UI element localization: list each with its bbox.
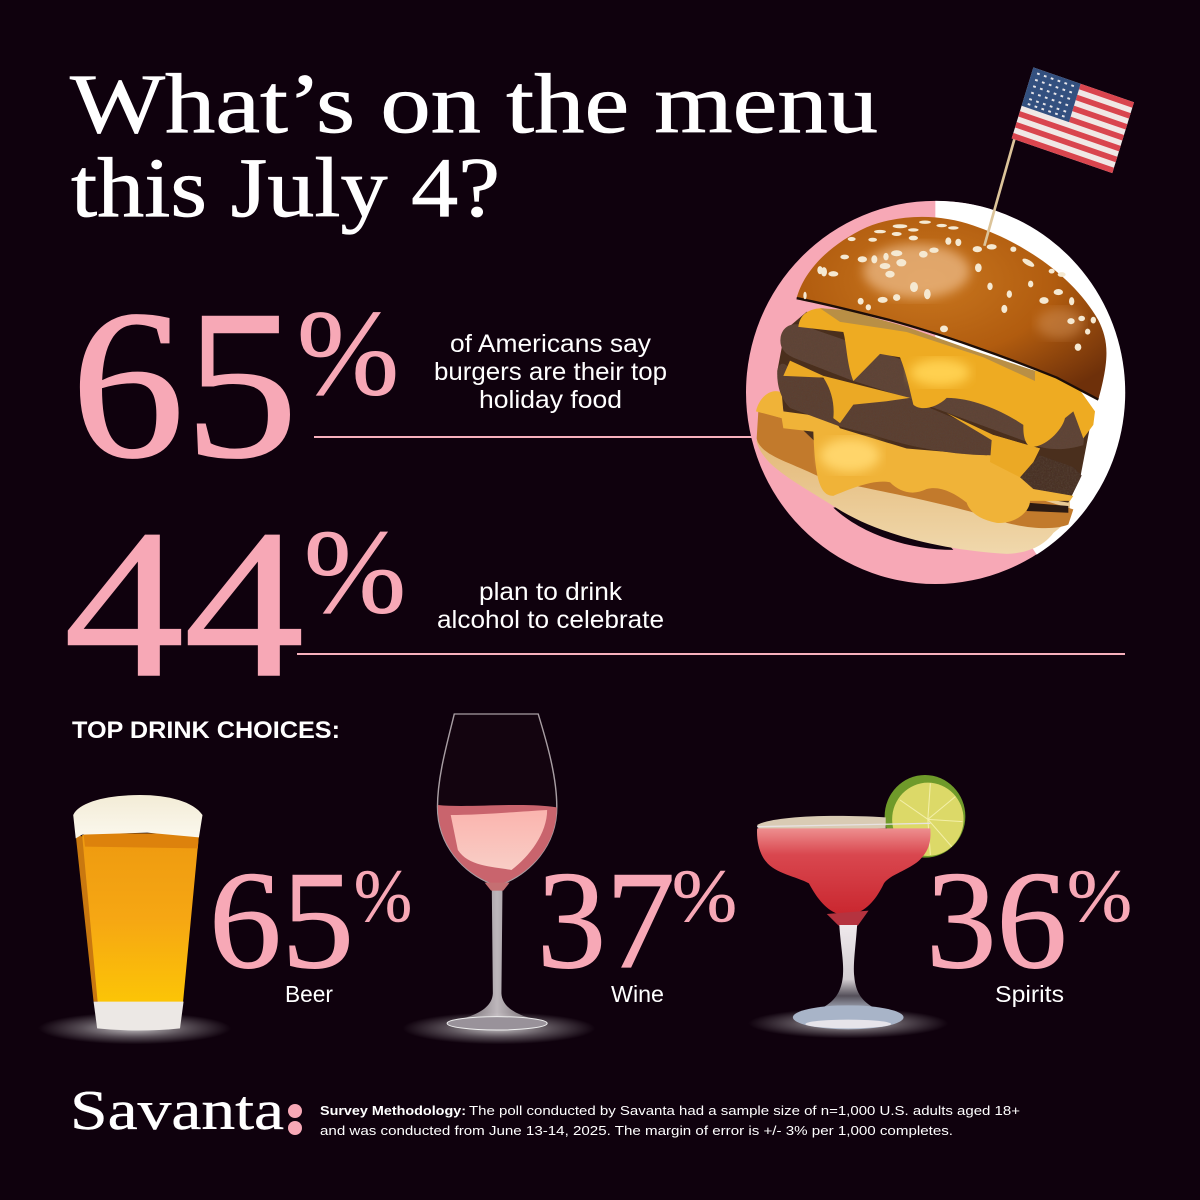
top bun bbox=[797, 217, 1106, 400]
lower cheese bbox=[756, 391, 1073, 523]
stem bbox=[821, 925, 875, 1008]
american flag bbox=[1012, 67, 1134, 173]
burger shadow bbox=[833, 499, 953, 550]
beer liquid bbox=[82, 835, 199, 1004]
label: beer: Beer bbox=[285, 981, 333, 1007]
text: burgers description: burgers are their top bbox=[434, 358, 667, 386]
stat: 44% alcohol: % bbox=[304, 505, 406, 638]
bun shine bbox=[863, 244, 970, 298]
right cheese drip bbox=[947, 413, 1040, 477]
stat: 65% burgers bbox=[71, 267, 399, 503]
stat: beer 65%: 65 bbox=[209, 843, 354, 998]
stat: wine 37%: 37 bbox=[537, 843, 675, 998]
stat: 44% alcohol bbox=[64, 486, 406, 721]
cheese highlight bbox=[910, 359, 970, 386]
text: alcohol description: alcohol to celebrate bbox=[437, 606, 664, 634]
stat: wine 37%: % bbox=[672, 855, 737, 938]
glass foot bbox=[793, 1005, 904, 1029]
bun right shine bbox=[1037, 308, 1083, 339]
toothpick bbox=[984, 139, 1014, 246]
lower patty bbox=[777, 364, 993, 455]
lime segments bbox=[900, 783, 962, 855]
survey methodology note bbox=[320, 1103, 1020, 1138]
cocktail bowl bbox=[757, 828, 931, 916]
text: burgers description: holiday food bbox=[479, 386, 622, 414]
survey methodology note: The poll conducted by Savanta had a sample size of n=1,000 U.S. adults aged 18+ bbox=[469, 1103, 1020, 1118]
salt rim bbox=[757, 816, 886, 830]
stat: 44% alcohol: 44 bbox=[64, 486, 304, 721]
drink: wine glass bbox=[402, 714, 595, 1044]
divider 1 bbox=[314, 436, 754, 438]
wine bowl glass bbox=[437, 714, 557, 884]
stat: spirits 36%: 36 bbox=[926, 843, 1067, 998]
upper cheese bbox=[798, 308, 1095, 447]
bun edge char bbox=[1027, 503, 1068, 513]
title: this July 4? bbox=[71, 141, 500, 235]
wine neck bbox=[485, 883, 510, 891]
survey methodology note: Survey Methodology: bbox=[320, 1103, 466, 1118]
survey methodology note: and was conducted from June 13-14, 2025. The margin of error is +/- 3% per 1,000 completes. bbox=[320, 1123, 953, 1138]
stat: beer 65%: % bbox=[354, 855, 412, 938]
third patty bbox=[1020, 455, 1082, 499]
wine stem bbox=[454, 887, 540, 1021]
sesame seeds bbox=[803, 220, 1096, 351]
foam bbox=[73, 795, 202, 838]
title bbox=[70, 57, 878, 235]
rose wine light bbox=[451, 810, 547, 870]
wine foot bbox=[447, 1017, 547, 1030]
flag stars bbox=[1028, 73, 1076, 118]
burger interior backdrop bbox=[777, 312, 1092, 503]
stat: spirits 36%: % bbox=[1067, 855, 1132, 938]
glass outer wall bbox=[76, 835, 99, 1002]
glow bbox=[748, 1008, 948, 1038]
drink: beer glass bbox=[38, 795, 231, 1044]
beer head line bbox=[84, 833, 199, 848]
glass base bbox=[94, 1002, 184, 1030]
flag canton bbox=[1022, 67, 1081, 122]
white ring segment bbox=[935, 201, 1125, 555]
foot highlight bbox=[805, 1020, 891, 1028]
bottom bun bbox=[757, 411, 1070, 554]
glass rim bbox=[757, 823, 930, 827]
rose wine bbox=[438, 805, 557, 883]
stat: 65% burgers: % bbox=[297, 286, 399, 421]
pink ring bbox=[746, 201, 1125, 584]
burger illustration bbox=[746, 67, 1134, 584]
divider 2 bbox=[297, 653, 1125, 655]
lime slice rind bbox=[885, 775, 965, 858]
toasted bun interior bbox=[757, 411, 1073, 528]
label: wine: Wine bbox=[611, 981, 664, 1007]
lime slice flesh bbox=[892, 783, 964, 856]
glow bbox=[38, 1012, 231, 1044]
text: alcohol description: plan to drink bbox=[479, 578, 623, 606]
stat: spirits 36% bbox=[926, 843, 1132, 998]
bun bottom edge bbox=[797, 298, 1098, 400]
text: alcohol description bbox=[437, 578, 664, 634]
label: spirits: Spirits bbox=[995, 981, 1064, 1007]
glass neck bbox=[827, 911, 869, 926]
lower cheese highlight bbox=[820, 438, 880, 472]
text: burgers description bbox=[434, 330, 667, 414]
stat: 65% burgers: 65 bbox=[71, 267, 298, 503]
middle cheese bbox=[783, 361, 910, 423]
heading: top drink choices: TOP DRINK CHOICES: bbox=[72, 717, 340, 744]
drink: margarita bbox=[748, 775, 965, 1038]
onion relish bbox=[820, 308, 1035, 381]
stat: beer 65% bbox=[209, 843, 412, 998]
title: What’s on the menu bbox=[70, 57, 878, 151]
glow bbox=[402, 1012, 595, 1044]
text: burgers description: of Americans say bbox=[450, 330, 652, 358]
logo: Savanta: Savanta bbox=[70, 1080, 284, 1142]
flag stripes bbox=[1012, 67, 1134, 173]
flag field bbox=[1012, 67, 1134, 173]
upper patty bbox=[780, 324, 1085, 449]
